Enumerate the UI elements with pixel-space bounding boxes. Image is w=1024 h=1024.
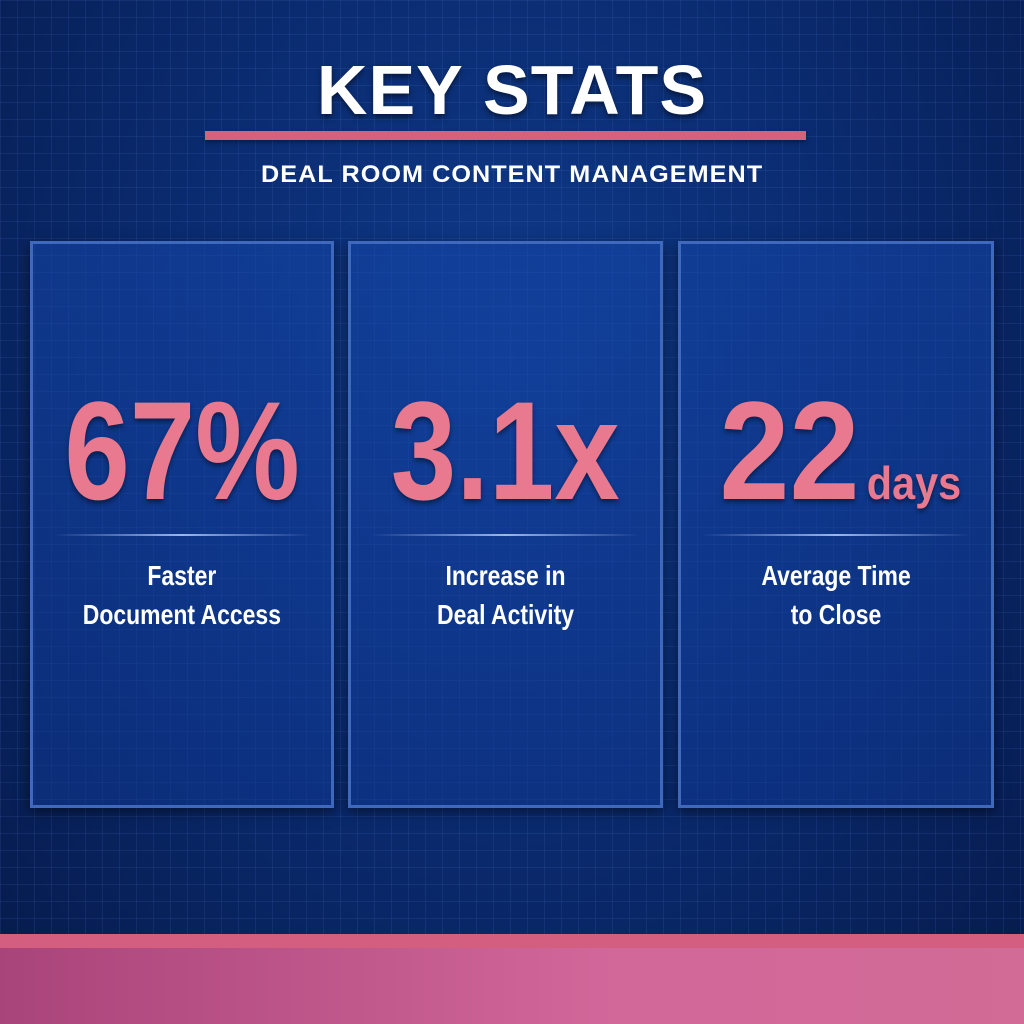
stat label: Increase in [446,560,565,591]
subtitle: DEAL ROOM CONTENT MANAGEMENT [261,161,763,188]
stat label: Faster [148,560,216,591]
footer [0,948,1024,1024]
panel: time to close [678,241,994,808]
stat number: 22 [719,372,859,529]
stat label: Document Access [83,599,281,630]
stat label [761,560,911,630]
title: KEY STATS [317,51,707,129]
panel: deal activity [348,241,663,808]
panel: faster document access [30,241,334,808]
stat label: Deal Activity [437,599,574,630]
footer pink band [0,934,1024,948]
stat label [437,560,574,630]
title underline [205,131,806,140]
stat number: 67% [64,372,300,529]
stat label: to Close [791,599,881,630]
stat label [83,560,281,630]
stat number [719,372,962,529]
stat label: Average Time [761,560,911,591]
stat number: 3.1x [391,372,620,529]
stat number: days [866,457,961,509]
